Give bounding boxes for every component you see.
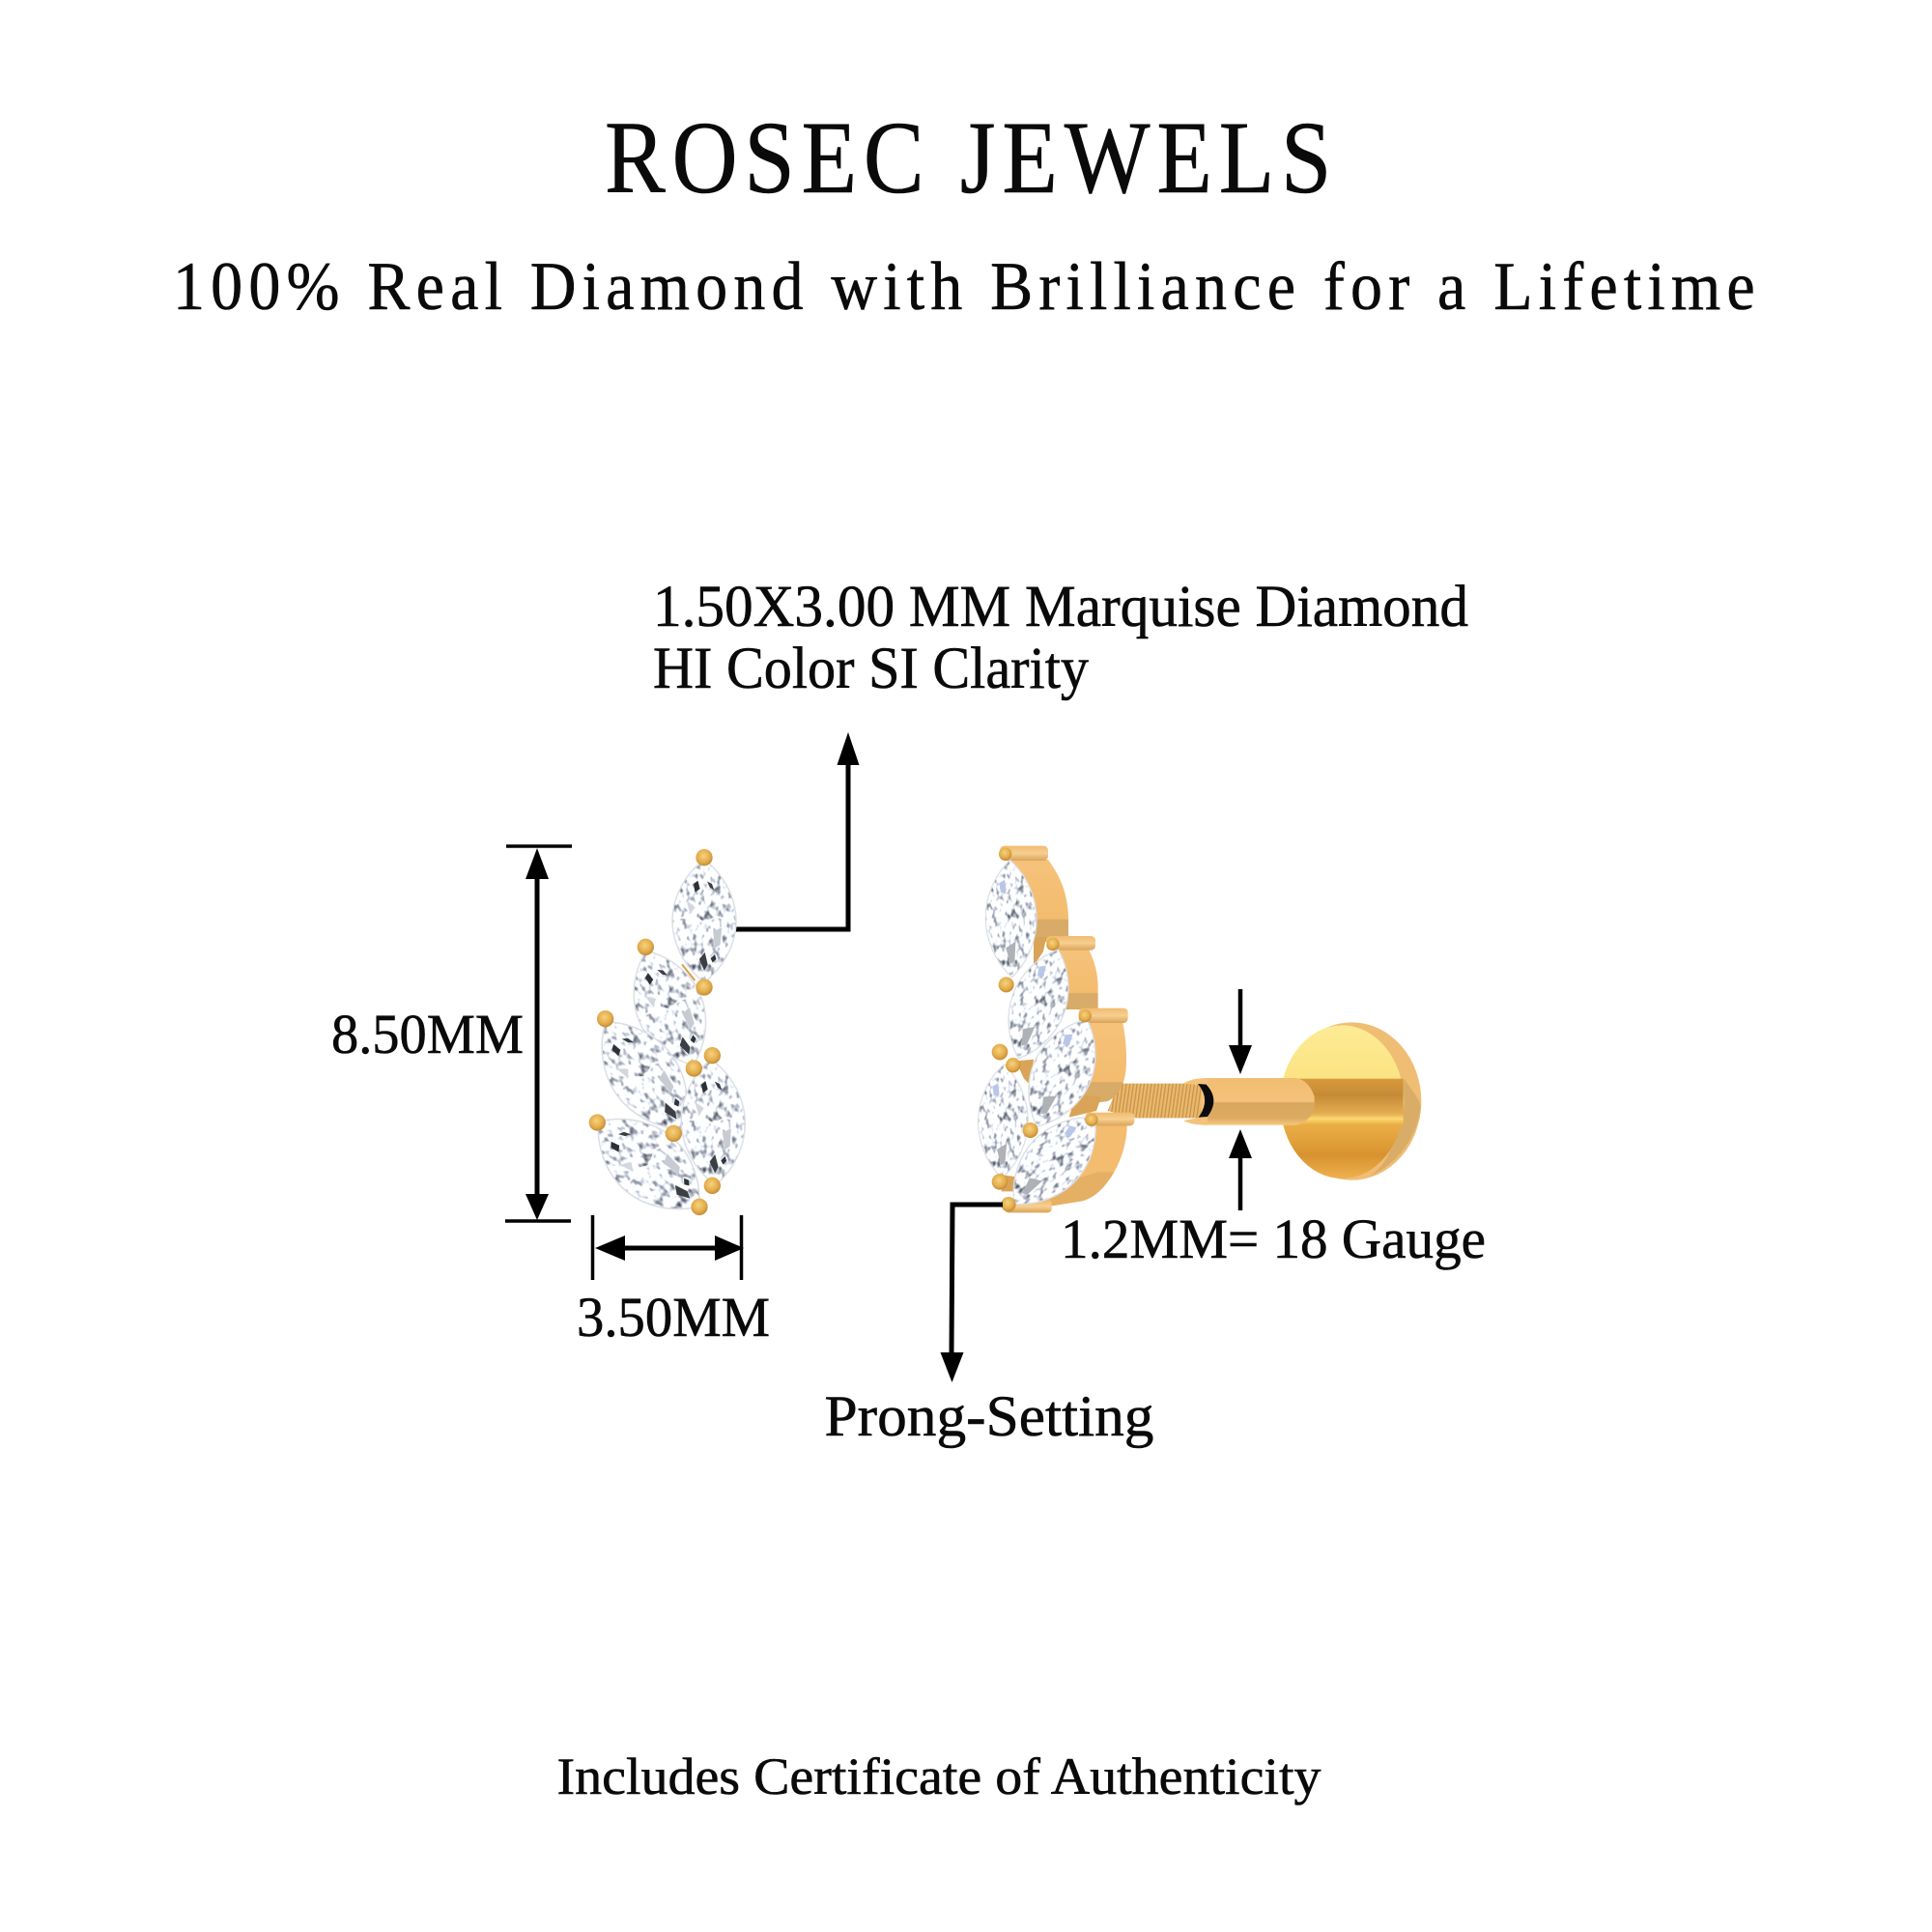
dimension: height 8.50MM	[505, 846, 572, 1221]
icon: front view earring with marquise diamonds	[576, 849, 748, 1234]
top bars	[1000, 846, 1134, 1212]
label: 3.50MM: 3.50MM	[577, 1286, 770, 1349]
side stone 2	[993, 940, 1084, 1067]
label: gauge: 1.2MM= 18 Gauge	[1061, 1208, 1486, 1270]
side stone 4	[978, 1064, 1029, 1179]
gold band 3	[1082, 1023, 1126, 1104]
side stone 1	[984, 860, 1037, 978]
shaft	[1205, 1078, 1315, 1125]
label: prong setting: Prong-Setting	[825, 1384, 1153, 1448]
dimension: post thickness arrows	[1229, 989, 1252, 1210]
gold band 2	[1053, 950, 1098, 1009]
title: ROSEC JEWELS	[605, 99, 1331, 214]
callout: diamond specification	[653, 575, 1468, 701]
black groove	[1198, 1084, 1213, 1118]
diamond quality text: HI Color SI Clarity	[653, 637, 1089, 701]
dimension: width 3.50MM	[593, 1215, 744, 1280]
diamond size text: 1.50X3.00 MM Marquise Diamond	[653, 575, 1468, 639]
marquise stone 1	[672, 860, 736, 982]
flat back disc	[1280, 1022, 1421, 1180]
prongs	[992, 847, 1098, 1211]
shaft collar	[1183, 1078, 1208, 1125]
subtitle: 100% Real Diamond with Brilliance for a Lifetime	[173, 248, 1755, 325]
marquise stone 3	[578, 1002, 711, 1150]
marquise stone 2	[615, 938, 724, 1078]
side stone 5	[993, 1097, 1116, 1224]
marquise stone 5	[576, 1094, 723, 1234]
marquise stone 4	[679, 1058, 748, 1186]
gold band 4	[1040, 1125, 1127, 1206]
side stone 3	[1010, 1007, 1114, 1139]
footer note: Includes Certificate of Authenticity	[556, 1747, 1321, 1805]
inner post	[1297, 1079, 1404, 1125]
arrow: prong setting leader	[941, 1205, 1003, 1382]
setting gallery	[1002, 937, 1101, 1191]
threaded pin	[1108, 1084, 1203, 1118]
prongs	[589, 849, 721, 1215]
gold wires between stones	[636, 964, 695, 1166]
arrow: diamond callout leader	[735, 732, 860, 929]
label: 8.50MM: 8.50MM	[331, 1003, 524, 1065]
icon: side view earring with flat back	[978, 846, 1421, 1224]
gold band 1	[1008, 860, 1068, 942]
